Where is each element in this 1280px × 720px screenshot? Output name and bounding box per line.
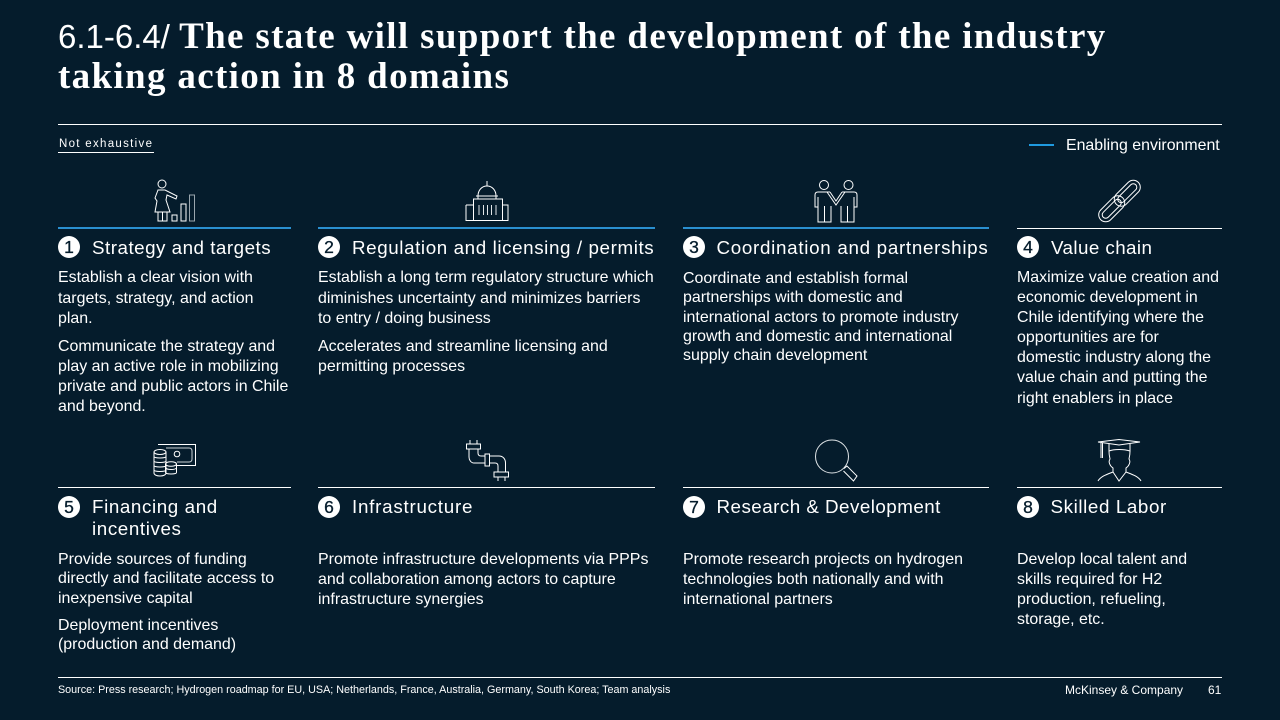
body text <box>683 270 959 364</box>
accent line <box>683 227 989 229</box>
body text: targets, strategy, and action <box>58 290 254 306</box>
number badge <box>683 496 705 518</box>
title: 6.1-6.4/ The state will support the development of the industry <box>58 16 1107 57</box>
header divider <box>58 124 1222 125</box>
divider line <box>58 487 291 488</box>
icon: banknote and coins <box>154 444 196 476</box>
body text: Accelerates and streamline licensing and <box>318 338 608 355</box>
panel: skilled labor <box>1017 439 1222 628</box>
number badge <box>318 496 340 518</box>
accent line <box>58 227 291 229</box>
body text: storage, etc. <box>1017 611 1105 628</box>
number badge: 4 <box>1023 237 1033 257</box>
body text: right enablers in place <box>1017 390 1173 407</box>
body text <box>58 616 236 653</box>
sticker: not exhaustive: Not exhaustive <box>59 138 153 150</box>
body text: private and public actors in Chile <box>58 378 288 395</box>
body text <box>58 550 274 606</box>
panel: research and development <box>683 440 989 608</box>
number badge <box>58 496 80 518</box>
body text: diminishes uncertainty and minimizes barriers <box>318 290 640 306</box>
body text: Establish a clear vision with <box>58 269 253 286</box>
number badge: 7 <box>689 497 699 517</box>
body text: permitting processes <box>318 358 465 375</box>
panel: value chain <box>1017 180 1222 407</box>
icon: graduate <box>1098 439 1142 482</box>
icon: magnifying glass <box>815 440 858 482</box>
body text: Establish a long term regulatory structure which <box>318 269 654 286</box>
body text: technologies both nationally and with <box>683 570 944 588</box>
divider line <box>1017 228 1222 229</box>
heading <box>92 496 218 539</box>
body text <box>1017 269 1219 407</box>
number badge <box>318 236 340 258</box>
heading: Strategy and targets <box>92 237 271 258</box>
body text: Provide sources of funding <box>58 550 247 568</box>
body text <box>1017 550 1187 628</box>
body text: to entry / doing business <box>318 310 491 327</box>
body text: infrastructure synergies <box>318 590 484 608</box>
number badge <box>58 236 80 258</box>
icon: chain link <box>1098 180 1141 222</box>
body text: economic development in <box>1017 289 1198 306</box>
body text: opportunities are for <box>1017 329 1159 346</box>
heading: Infrastructure <box>352 496 473 517</box>
body text: Maximize value creation and <box>1017 269 1219 286</box>
body text: inexpensive capital <box>58 590 193 606</box>
body text: international partners <box>683 590 833 608</box>
body text <box>683 550 963 608</box>
body text: partnerships with domestic and <box>683 289 903 306</box>
panel: financing and incentives <box>58 444 291 653</box>
number badge: 6 <box>324 497 334 517</box>
number badge: 5 <box>64 497 74 517</box>
icon: pipes <box>466 440 509 481</box>
body text: Communicate the strategy and <box>58 338 275 355</box>
body text <box>318 269 654 327</box>
divider line <box>318 487 655 488</box>
number badge <box>683 236 705 258</box>
body text <box>58 338 288 415</box>
page number: 61 <box>1208 683 1221 697</box>
number badge: 3 <box>689 237 699 257</box>
body text <box>58 269 254 327</box>
heading: Research & Development <box>716 496 941 517</box>
body text: Coordinate and establish formal <box>683 270 908 287</box>
panel: coordination and partnerships <box>683 180 989 364</box>
footer divider <box>58 677 1222 678</box>
legend line <box>1029 144 1054 146</box>
panel: strategy and targets <box>58 180 291 415</box>
body text: Develop local talent and <box>1017 550 1187 568</box>
body text: domestic industry along the <box>1017 349 1211 366</box>
divider line <box>1017 487 1222 488</box>
heading: incentives <box>92 518 182 539</box>
divider line <box>683 487 989 488</box>
footer brand: McKinsey & Company <box>1065 683 1183 697</box>
heading: Financing and <box>92 496 218 517</box>
body text <box>318 338 608 375</box>
body text: and beyond. <box>58 398 146 415</box>
source note: Source: Press research; Hydrogen roadmap for EU, USA; Netherlands, France, Australia, Germany, South Korea; Team analysis <box>58 684 670 696</box>
body text: supply chain development <box>683 347 867 364</box>
number badge <box>1017 496 1039 518</box>
number badge: 2 <box>324 237 334 257</box>
body text <box>318 550 648 608</box>
body text: growth and domestic and international <box>683 328 952 345</box>
body text: value chain and putting the <box>1017 369 1208 386</box>
icon: person with bar chart <box>154 180 195 222</box>
accent line <box>318 227 655 229</box>
body text: Deployment incentives <box>58 616 218 634</box>
number badge: 1 <box>64 237 74 257</box>
heading: Coordination and partnerships <box>716 237 988 258</box>
heading: Value chain <box>1051 237 1152 258</box>
body text: Promote research projects on hydrogen <box>683 550 963 568</box>
body text: Promote infrastructure developments via PPPs <box>318 550 648 568</box>
panel: regulation and licensing <box>318 181 655 375</box>
heading: Skilled Labor <box>1050 496 1167 517</box>
panel: infrastructure <box>318 440 655 608</box>
title <box>58 16 1107 97</box>
body text: directly and facilitate access to <box>58 570 274 587</box>
number badge <box>1017 236 1039 258</box>
title: taking action in 8 domains <box>58 56 510 97</box>
body text: (production and demand) <box>58 636 236 653</box>
icon: capitol building <box>466 181 508 221</box>
icon: two people holding hands <box>814 180 858 222</box>
number badge: 8 <box>1023 497 1033 517</box>
body text: Chile identifying where the <box>1017 309 1204 326</box>
body text: international actors to promote industry <box>683 309 959 326</box>
body text: plan. <box>58 310 93 327</box>
legend label: Enabling environment <box>1066 137 1220 154</box>
body text: production, refueling, <box>1017 591 1166 608</box>
body text: and collaboration among actors to capture <box>318 570 616 588</box>
body text: skills required for H2 <box>1017 571 1162 588</box>
heading: Regulation and licensing / permits <box>352 237 654 258</box>
body text: play an active role in mobilizing <box>58 358 279 375</box>
